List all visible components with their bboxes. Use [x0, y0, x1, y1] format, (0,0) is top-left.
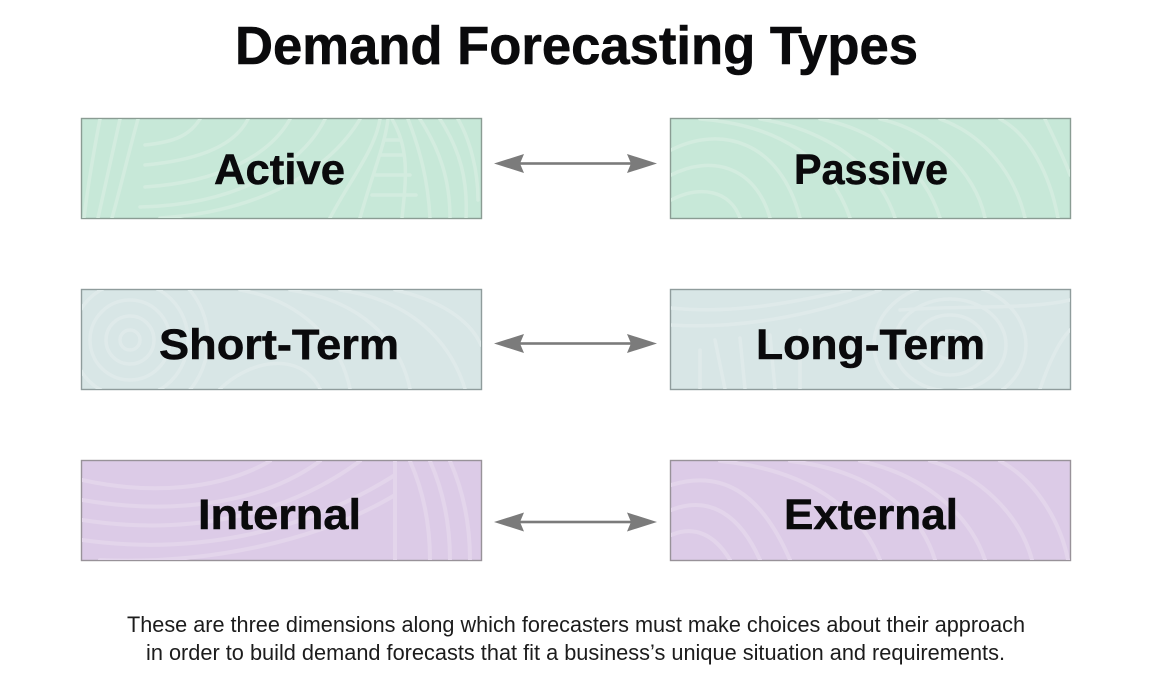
footnote: in order to build demand forecasts that fit a business’s unique situation and requirements. — [146, 640, 1005, 665]
label: active: Active — [214, 146, 345, 194]
footnote — [127, 612, 1025, 665]
panel: passive — [670, 118, 1070, 218]
label: passive: Passive — [794, 146, 948, 194]
panel: long-term — [670, 288, 1072, 390]
panel: active — [82, 118, 482, 218]
label: short-term: Short-Term — [159, 321, 399, 369]
arrow: active to passive — [494, 154, 657, 173]
panel: internal — [82, 460, 482, 561]
title: Demand Forecasting Types — [235, 16, 918, 76]
arrow: internal to external — [494, 512, 657, 532]
label: external: External — [784, 491, 958, 539]
label: long-term: Long-Term — [756, 321, 985, 369]
label: internal: Internal — [198, 491, 361, 539]
footnote: These are three dimensions along which forecasters must make choices about their approach — [127, 612, 1025, 637]
panel: external — [670, 460, 1070, 560]
arrow: short-term to long-term — [494, 334, 657, 353]
panel: short-term — [80, 288, 482, 390]
